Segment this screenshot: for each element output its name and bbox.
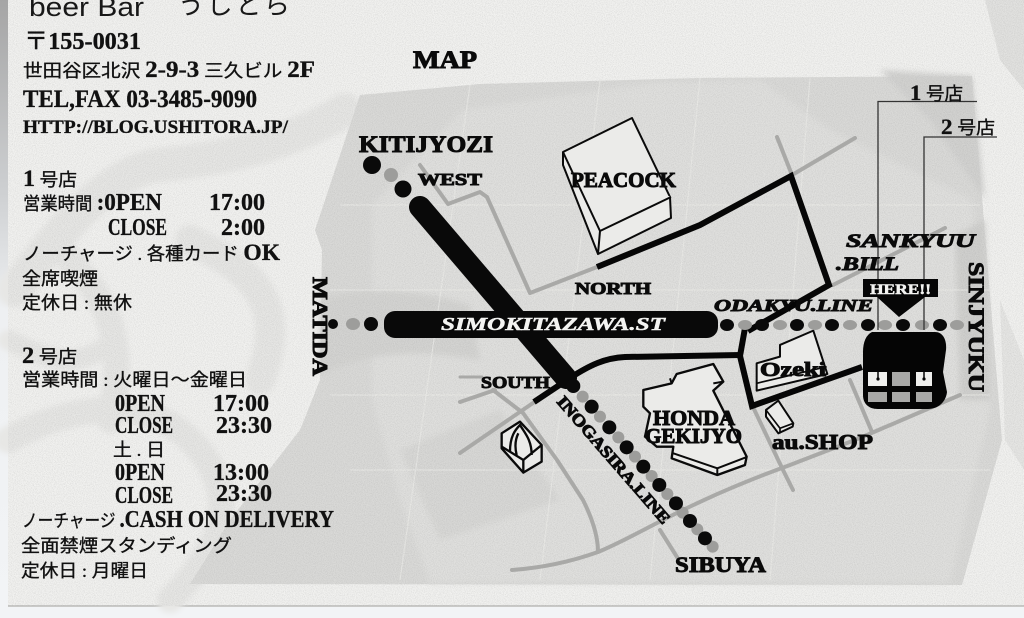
- label: Simokitazawa.st: SIMOKITAZAWA.ST: [441, 314, 666, 334]
- label: West: WEST: [418, 170, 483, 189]
- store 2 details: [21, 343, 334, 581]
- weekday close time: 23:30: [216, 413, 272, 439]
- phone: TEL,FAX 03-3485-9090: [23, 86, 257, 113]
- store 1 details: [22, 166, 280, 313]
- Simokitazawa station bar: [384, 311, 718, 338]
- decorative gray wave shapes: [8, 110, 345, 600]
- postal code: 〒155-0031: [24, 29, 141, 55]
- Kitijyozi line dots: [363, 156, 412, 198]
- label: Peacock: PEACOCK: [571, 168, 677, 192]
- diagonal station bar: [420, 207, 566, 378]
- main black roads: [534, 176, 862, 406]
- label: HERE: HERE!!: [870, 282, 931, 298]
- store 1 heading: 1 号店: [23, 166, 77, 191]
- store 1 holiday: 定休日 : 無休: [22, 293, 132, 313]
- weekend heading: 土 . 日: [113, 440, 165, 460]
- store 2 weekday hours heading: 営業時間 : 火曜日～金曜日: [22, 370, 247, 390]
- label: Odakyu line: ODAKYU.LINE: [714, 296, 873, 315]
- label: Honda: HONDA: [653, 406, 736, 430]
- label: store 2: 2 号店: [941, 114, 995, 139]
- street address: 世田谷区北沢 2-9-3 三久ビル 2F: [23, 57, 315, 82]
- weekday close: CLOSE: [115, 413, 173, 439]
- HERE callout arrow: [863, 279, 938, 317]
- weekday open time: 17:00: [213, 391, 269, 417]
- store 1 open: 営業時間 :0PEN: [23, 190, 163, 216]
- Odakyu line dots: [328, 317, 964, 331]
- store 2 payment: ノーチャージ .CASH ON DELIVERY: [22, 507, 334, 533]
- weekend open time: 13:00: [213, 460, 269, 486]
- store 1 open time: 17:00: [209, 190, 265, 216]
- label: Sibuya: SIBUYA: [675, 552, 766, 577]
- label: Inogasira line: INOGASIRA.LINE: [553, 392, 674, 528]
- website: HTTP://BLOG.USHITORA.JP/: [23, 117, 289, 138]
- label: Bill: .BILL: [836, 254, 899, 275]
- store 1 smoking: 全席喫煙: [22, 269, 98, 289]
- store 1 close: CLOSE: [108, 215, 167, 241]
- label: Sankyuu: SANKYUU: [846, 231, 977, 252]
- store 2 smoking: 全面禁煙スタンディング: [21, 536, 232, 556]
- building windows: [868, 372, 932, 402]
- label: North: NORTH: [575, 279, 651, 298]
- gray side streets: [420, 137, 960, 570]
- store 2 holiday: 定休日 : 月曜日: [21, 561, 148, 581]
- store leader lines: [878, 102, 997, 330]
- building: Ozeki: [757, 331, 827, 391]
- map background area: [190, 70, 1002, 585]
- store 1 payment: ノーチャージ . 各種カード OK: [23, 240, 280, 265]
- weekday open: 0PEN: [115, 391, 166, 417]
- label: Sinjyuku: SINJYUKU: [964, 262, 989, 392]
- store building: [863, 332, 947, 409]
- Inogasira line dots: [566, 379, 719, 553]
- label: Ozeki: Ozeki: [760, 359, 827, 381]
- address block: [23, 29, 315, 138]
- label: Matida: MATIDA: [308, 277, 332, 377]
- shop name heading: [29, 0, 290, 22]
- label: Gekijyo: GEKIJYO: [645, 424, 742, 448]
- store 2 heading: 2 号店: [22, 343, 77, 368]
- weekend close time: 23:30: [216, 481, 272, 507]
- building: Honda Gekijyo: [643, 364, 747, 475]
- icon: church building: [502, 422, 542, 473]
- weekend close: CLOSE: [115, 483, 173, 509]
- store 1 close time: 2:00: [221, 215, 265, 241]
- label: store 1: 1 号店: [910, 80, 963, 105]
- label: South: SOUTH: [481, 373, 550, 392]
- label: Kitijyozi: KITIJYOZI: [359, 132, 493, 157]
- weekend open: 0PEN: [115, 460, 166, 486]
- building: Peacock: [563, 118, 677, 254]
- map title: MAP: [413, 47, 477, 74]
- building: au shop: [766, 401, 873, 454]
- label: au.SHOP: au.SHOP: [772, 430, 873, 454]
